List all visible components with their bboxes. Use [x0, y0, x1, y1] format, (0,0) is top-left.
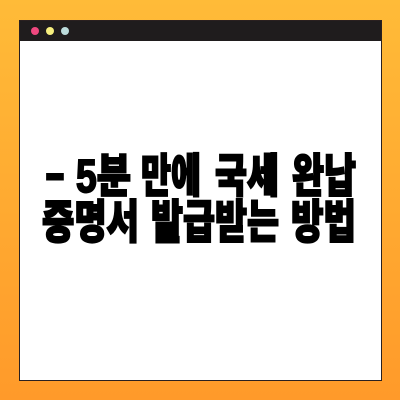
icon: yellow dot: [46, 27, 54, 35]
title: 완납: [292, 150, 356, 202]
icon: pink dot: [31, 27, 39, 35]
title: 국세: [215, 150, 279, 202]
icon: pale blue dot: [61, 27, 69, 35]
title: 증명서: [42, 196, 139, 248]
title: -: [45, 147, 65, 199]
title: 발급받는: [151, 196, 279, 248]
title: 만에: [141, 150, 201, 202]
title: 5분: [76, 150, 131, 202]
title bar: [20, 21, 381, 41]
title: 방법: [291, 196, 356, 248]
